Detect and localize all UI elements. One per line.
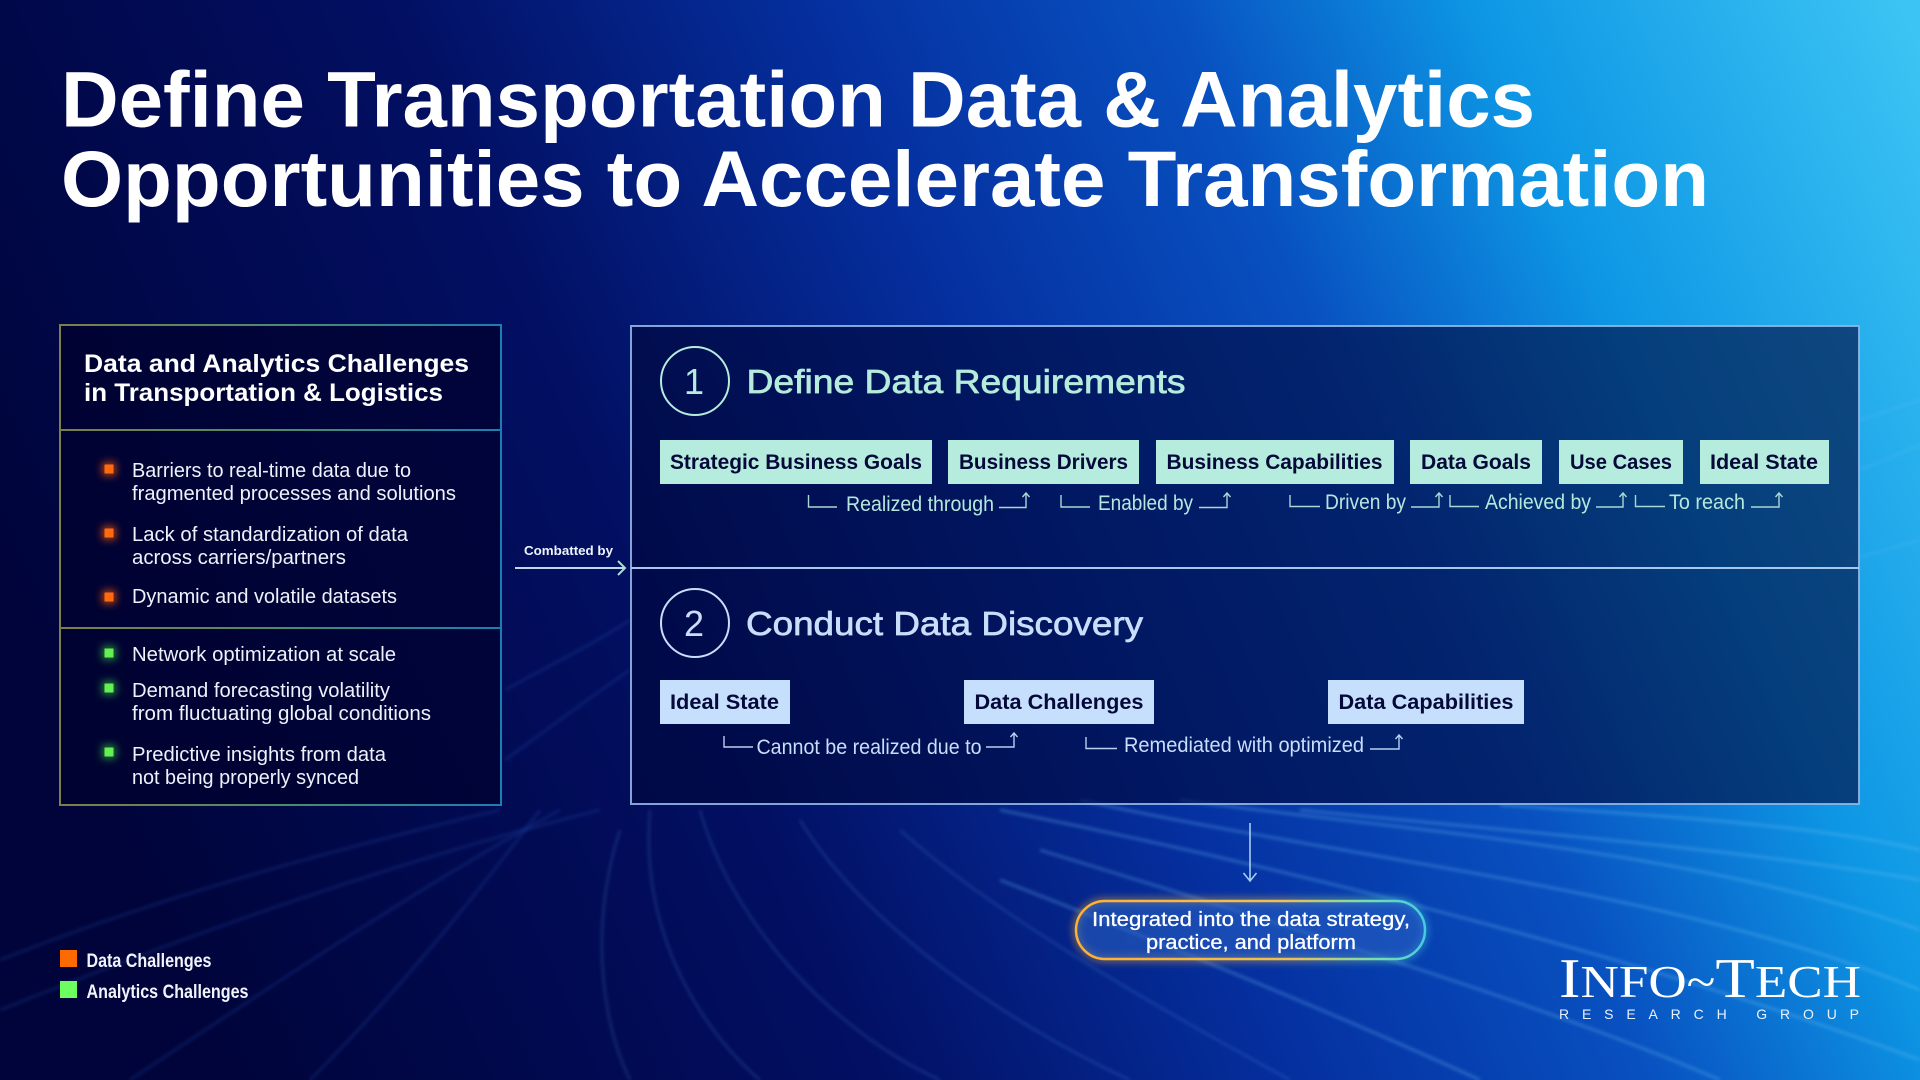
legend	[60, 950, 248, 1003]
step 2 heading: Conduct Data Discovery	[746, 605, 1144, 642]
bullet: orange	[102, 462, 116, 476]
text: demand: Demand forecasting volatility	[132, 680, 390, 702]
arrow: combatted by: Combatted by	[524, 543, 614, 558]
callout: outcome pill: practice, and platform	[1146, 932, 1356, 954]
connector: enabled by	[1061, 492, 1230, 515]
text: standardization: across carriers/partners	[132, 547, 346, 569]
text: predictive	[132, 744, 387, 789]
chip: data capabilities: Data Capabilities	[1338, 691, 1514, 714]
logo: INFO~ TECH	[1559, 948, 1861, 1010]
text: barriers: Barriers to real-time data due to	[132, 460, 411, 482]
chip: data goals	[1410, 440, 1542, 484]
connector: achieved by	[1450, 491, 1626, 514]
step 2	[660, 589, 1524, 759]
chip: strategic business goals	[660, 440, 932, 484]
panel: steps	[631, 326, 1859, 804]
text: standardization	[132, 524, 409, 569]
connector: driven by	[1290, 491, 1442, 514]
connector: to reach: To reach	[1669, 491, 1745, 514]
step 1 number: 1	[684, 361, 704, 402]
chip: ideal state: Ideal State	[1710, 451, 1818, 474]
bullet: green	[102, 646, 116, 660]
chip: business drivers: Business Drivers	[959, 451, 1128, 474]
chip: use cases	[1559, 440, 1683, 484]
panel heading	[84, 350, 469, 407]
step 1	[660, 347, 1829, 516]
chip: data challenges: Data Challenges	[974, 691, 1144, 714]
text: standardization: Lack of standardization of data	[132, 524, 409, 546]
chip: ideal state: Ideal State	[670, 691, 779, 714]
chip: use cases: Use Cases	[1570, 451, 1672, 474]
chip: data goals: Data Goals	[1421, 451, 1531, 474]
text: predictive: not being properly synced	[132, 767, 359, 789]
chip: data challenges	[964, 680, 1154, 724]
connector: realized through: Realized through	[846, 493, 994, 516]
panel heading: Data and Analytics Challenges	[84, 350, 469, 378]
chip: strategic business goals: Strategic Business Goals	[670, 451, 922, 474]
logo: RESEARCH GROUP	[1559, 1006, 1859, 1022]
bullet: orange	[102, 526, 116, 540]
text: predictive: Predictive insights from data	[132, 744, 387, 766]
connector: achieved by: Achieved by	[1485, 491, 1591, 514]
connector: remediated: Remediated with optimized	[1124, 734, 1364, 757]
legend: data challenges: Data Challenges	[86, 951, 212, 972]
chip: business capabilities	[1156, 440, 1394, 484]
connector: cannot be realized: Cannot be realized due to	[756, 736, 982, 759]
bullet: green	[102, 745, 116, 759]
step 2 number: 2	[684, 603, 704, 644]
chip: ideal state	[1700, 440, 1829, 484]
callout: outcome pill	[1076, 901, 1425, 959]
step 2 number	[661, 589, 729, 657]
text: barriers: fragmented processes and solutions	[132, 483, 456, 505]
connector: enabled by: Enabled by	[1098, 492, 1193, 515]
chip: data capabilities	[1328, 680, 1524, 724]
chip: business capabilities: Business Capabilities	[1166, 451, 1382, 474]
connector: driven by: Driven by	[1325, 491, 1406, 514]
step 1 heading: Define Data Requirements	[746, 363, 1186, 400]
title: Opportunities to Accelerate Transformation	[61, 134, 1709, 223]
panel heading: in Transportation & Logistics	[84, 379, 443, 407]
title: Define Transportation Data & Analytics	[61, 54, 1535, 144]
arrow: combatted by	[515, 543, 625, 575]
chip: business drivers	[948, 440, 1139, 484]
text: barriers	[132, 460, 456, 505]
text: volatile: Dynamic and volatile datasets	[132, 586, 397, 608]
title	[61, 54, 1709, 223]
callout: outcome pill: Integrated into the data strategy,	[1092, 909, 1410, 931]
connector: to reach	[1636, 491, 1782, 514]
text: network: Network optimization at scale	[132, 644, 396, 666]
bullet: green	[102, 681, 116, 695]
legend: analytics challenges: Analytics Challenges	[86, 982, 248, 1003]
chip: ideal state	[660, 680, 790, 724]
arrow: down to outcome	[1244, 823, 1256, 881]
legend: data challenges	[60, 950, 212, 972]
bullet: orange	[102, 590, 116, 604]
panel: challenges	[60, 325, 501, 805]
text: demand: from fluctuating global conditions	[132, 703, 431, 725]
text: demand	[132, 680, 431, 725]
step 1 number	[661, 347, 729, 415]
